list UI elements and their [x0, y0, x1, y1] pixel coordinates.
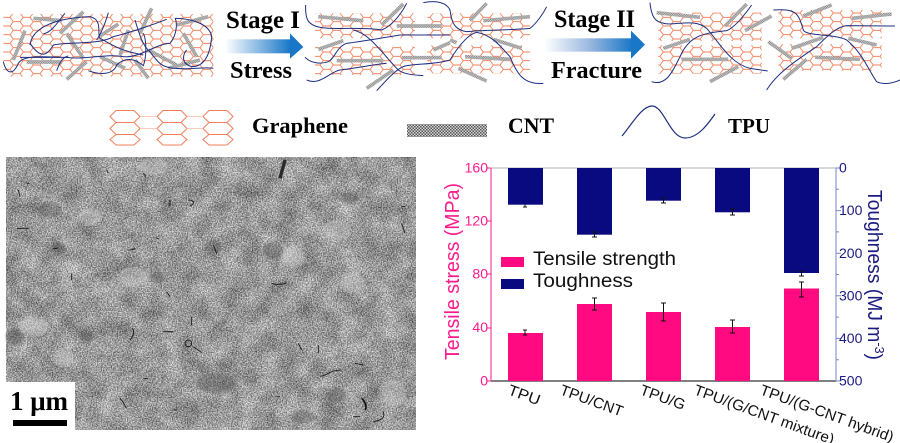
left axis tick labels: 0	[480, 372, 488, 388]
left axis title: Tensile stress (MPa)	[442, 183, 464, 360]
right axis tick labels: 300	[839, 288, 863, 304]
icon: CNT legend	[407, 124, 487, 137]
panel: initial composite network	[3, 8, 213, 79]
arrow: stage I	[225, 33, 303, 59]
right axis tick labels: 100	[839, 202, 863, 218]
panel: fractured composite	[650, 3, 900, 90]
axes	[487, 168, 841, 381]
left axis tick labels: 120	[465, 212, 488, 228]
x axis category labels: TPU/(G-CNT hybrid)	[758, 382, 896, 443]
icon: graphene legend	[110, 110, 233, 145]
x axis category labels: TPU	[506, 382, 542, 409]
icon: TPU legend	[622, 106, 715, 138]
x axis category labels	[506, 382, 896, 443]
right axis tick labels: 500	[839, 372, 863, 388]
right axis title: -3	[872, 342, 887, 354]
heading: Fracture: Fracture	[551, 58, 642, 84]
left axis tick labels: 80	[472, 266, 488, 282]
label: Graphene: Graphene	[252, 113, 348, 138]
panel: deformation schematic	[3, 2, 900, 91]
right axis tick labels	[839, 160, 863, 388]
label: CNT: CNT	[508, 113, 554, 138]
right axis tick labels: 400	[839, 330, 863, 346]
right axis title: )	[863, 354, 885, 360]
label: TPU: TPU	[728, 114, 770, 138]
heading: Stage I: Stage I	[226, 7, 300, 34]
panel: stage I composite	[305, 2, 547, 91]
chart: tensile stress and toughness	[442, 160, 896, 443]
scale bar label: 1 μm	[10, 386, 69, 416]
right axis tick labels: 200	[839, 245, 863, 261]
error bars	[523, 198, 804, 335]
right axis title: Toughness (MJ m	[863, 190, 885, 348]
left axis tick labels: 40	[472, 319, 488, 335]
bars: tensile strength	[508, 288, 819, 381]
legend: Tensile strength	[533, 249, 676, 270]
heading: Stress: Stress	[230, 58, 292, 84]
right axis tick labels: 0	[839, 160, 847, 176]
x axis category labels: TPU/G	[638, 382, 688, 414]
scale bar label	[6, 382, 75, 430]
heading: Stage II: Stage II	[554, 6, 635, 33]
x axis category labels: TPU/CNT	[558, 382, 625, 420]
left axis tick labels	[465, 160, 488, 388]
legend: Toughness	[533, 271, 633, 292]
panel: TEM micrograph	[6, 157, 416, 430]
legend	[501, 249, 676, 292]
bars: toughness	[508, 168, 819, 273]
left axis tick labels: 160	[465, 160, 488, 176]
arrow: stage II	[544, 31, 645, 59]
